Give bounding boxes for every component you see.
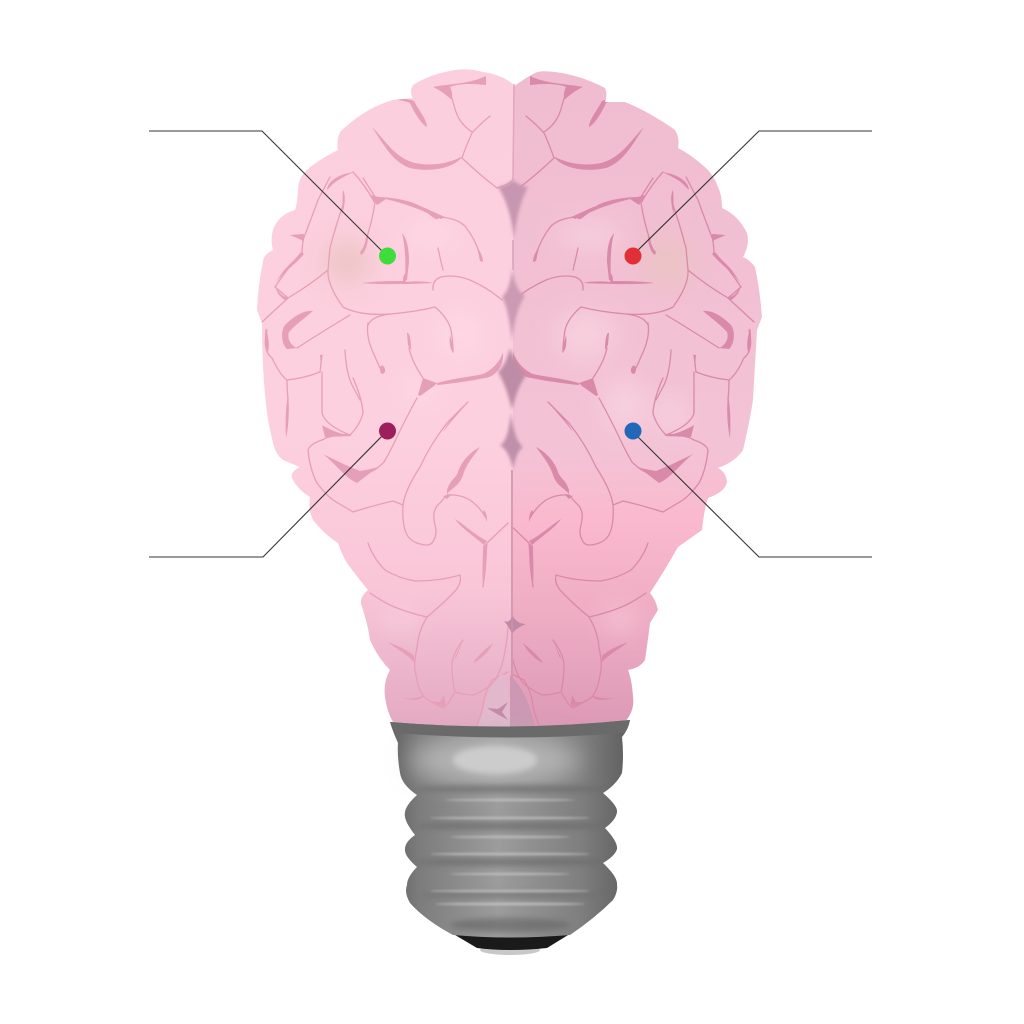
thread light lines [430,799,590,905]
callout line: top left [149,131,387,256]
metal highlight [410,736,580,784]
marker: red dot [624,248,642,264]
central fissure [498,84,528,730]
lower centre islands [477,674,510,728]
brain: bulb glass [250,60,777,735]
callout line: bottom left [149,431,387,557]
base black contact cap [450,932,573,950]
left sulci [262,76,513,727]
marker: blue dot [624,422,642,440]
marker: green dot [379,248,396,264]
infographic: brain light bulb [149,69,872,955]
tan glow [648,244,687,280]
screw base of the bulb [390,720,630,955]
base bottom highlight [480,945,540,955]
threaded metal body [390,720,630,938]
thread shading bands [415,785,605,932]
right sulci [503,76,754,727]
gyrus highlights [380,221,485,630]
gyrus highlights [561,222,679,632]
base rim shadow [390,720,630,738]
marker: magenta dot [379,422,396,440]
callout line: top right [632,131,872,256]
left hemisphere [250,60,514,735]
callout line: bottom right [632,431,872,557]
tan glow [323,240,371,284]
right hemisphere [513,71,762,726]
